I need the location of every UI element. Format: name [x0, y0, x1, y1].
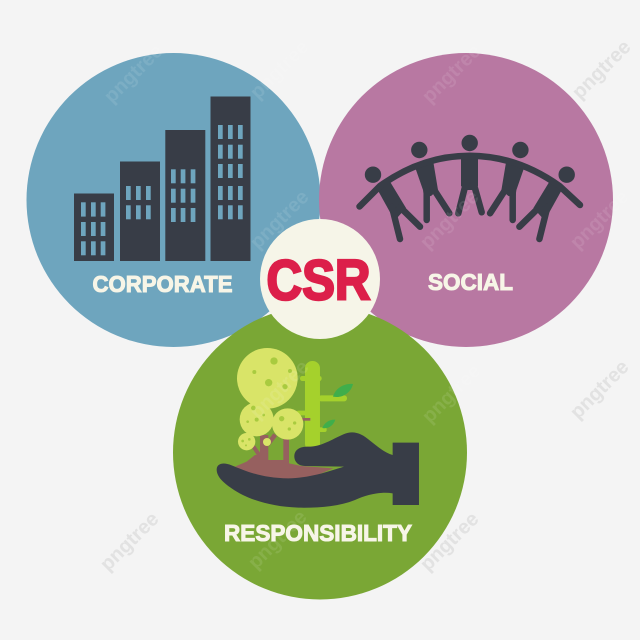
CSR infographic: pngtree	[96, 508, 163, 576]
panel: responsibility circle	[173, 306, 467, 600]
watermarks: pngtree	[246, 356, 313, 424]
panel: social circle	[319, 53, 613, 347]
tree crowns	[237, 348, 303, 450]
leaves	[322, 384, 353, 428]
watermarks: pngtree	[244, 506, 311, 574]
CSR infographic: pngtree	[568, 36, 635, 104]
hand	[217, 432, 419, 508]
watermarks: pngtree	[418, 40, 485, 108]
watermarks: pngtree	[246, 36, 313, 104]
icon: buildings	[74, 96, 250, 261]
watermarks: pngtree	[416, 186, 483, 254]
watermarks: pngtree	[418, 360, 485, 428]
watermarks	[100, 36, 633, 574]
soil and trunks	[235, 418, 333, 480]
panel: CSR centre badge	[260, 219, 380, 339]
icon: five people linked in an arc	[360, 135, 580, 239]
icon: hand holding trees	[217, 348, 419, 508]
panel: corporate circle	[26, 53, 320, 347]
plant stalk	[297, 361, 347, 451]
label: corporate: CORPORATE	[92, 271, 232, 297]
watermarks: pngtree	[100, 40, 167, 108]
CSR infographic: pngtree	[566, 356, 633, 424]
label: responsibility: RESPONSIBILITY	[224, 520, 412, 546]
label: social: SOCIAL	[428, 269, 513, 295]
watermarks: pngtree	[566, 186, 633, 254]
CSR infographic: pngtree	[416, 508, 483, 576]
title: CSR: CSR	[266, 248, 370, 312]
watermarks: pngtree	[246, 186, 313, 254]
